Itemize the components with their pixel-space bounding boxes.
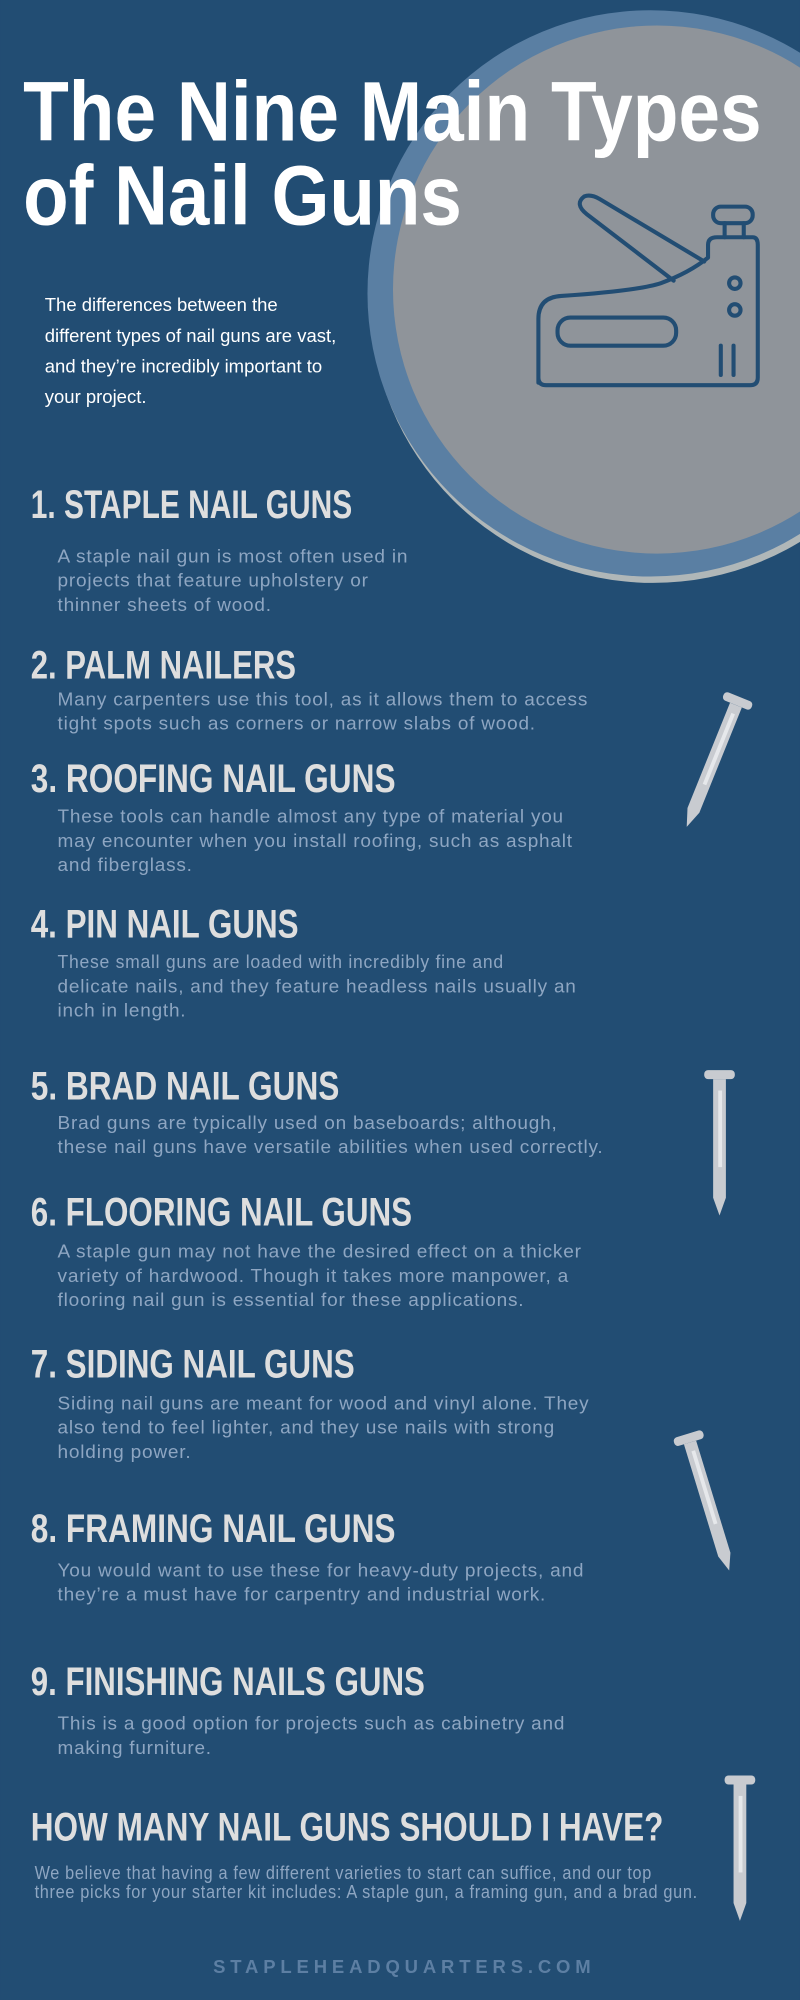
intro text: your project. (45, 386, 146, 407)
section 4: These small guns are loaded with incredibly fine and (58, 951, 504, 972)
intro text: and they’re incredibly important to (45, 355, 322, 376)
section 9 (31, 1660, 565, 1758)
section 1: thinner sheets of wood. (58, 594, 272, 615)
section 9: making furniture. (58, 1737, 212, 1758)
section: how many: HOW MANY NAIL GUNS SHOULD I HAVE? (31, 1806, 663, 1850)
section 7 (31, 1343, 589, 1462)
section 1 (31, 483, 408, 615)
section 2: tight spots such as corners or narrow slabs of wood. (58, 713, 536, 734)
section 1: A staple nail gun is most often used in (58, 545, 408, 566)
section 7: holding power. (58, 1441, 191, 1462)
section 8: You would want to use these for heavy-duty projects, and (58, 1560, 584, 1581)
icon: nail vertical 2 (725, 1776, 755, 1921)
title (23, 64, 762, 242)
icon: nail diagonal 1 (673, 691, 753, 833)
section 7: also tend to feel lighter, and they use nails with strong (58, 1417, 555, 1438)
section 6 (31, 1191, 582, 1310)
section 5: Brad guns are typically used on baseboards; although, (58, 1112, 558, 1133)
footer: STAPLEHEADQUARTERS.COM (213, 1956, 591, 1977)
section 6: 6. FLOORING NAIL GUNS (31, 1191, 412, 1235)
section 3: 3. ROOFING NAIL GUNS (31, 757, 396, 801)
section 8 (31, 1507, 584, 1605)
section 3: may encounter when you install roofing, such as asphalt (58, 830, 573, 851)
intro text (45, 294, 336, 407)
icon: nail diagonal 2 (673, 1429, 744, 1575)
section 8: they’re a must have for carpentry and industrial work. (58, 1584, 546, 1605)
section 5: 5. BRAD NAIL GUNS (31, 1064, 339, 1108)
section 8: 8. FRAMING NAIL GUNS (31, 1507, 396, 1551)
intro text: different types of nail guns are vast, (45, 325, 336, 346)
section 5: these nail guns have versatile abilities when used correctly. (58, 1136, 603, 1157)
section 6: variety of hardwood. Though it takes more manpower, a (58, 1265, 569, 1286)
section 7: 7. SIDING NAIL GUNS (31, 1343, 355, 1387)
section 9: This is a good option for projects such as cabinetry and (58, 1713, 565, 1734)
section 7: Siding nail guns are meant for wood and vinyl alone. They (58, 1392, 589, 1413)
section 5 (31, 1064, 603, 1157)
section 4: inch in length. (58, 1000, 186, 1021)
icon: staple gun (538, 196, 758, 385)
section 2: Many carpenters use this tool, as it allows them to access (58, 688, 588, 709)
section 1: projects that feature upholstery or (58, 570, 369, 591)
intro text: The differences between the (45, 294, 278, 315)
section 6: flooring nail gun is essential for these applications. (58, 1289, 524, 1310)
title: of Nail Guns (23, 148, 462, 242)
section 4: delicate nails, and they feature headless nails usually an (58, 975, 577, 996)
section 4: 4. PIN NAIL GUNS (31, 902, 299, 946)
section: how many (31, 1806, 698, 1902)
section 3: and fiberglass. (58, 854, 193, 875)
section: how many: three picks for your starter kit includes: A staple gun, a framing gun, and a brad gun. (35, 1881, 698, 1902)
icon: nail vertical 1 (704, 1070, 735, 1216)
section: how many: We believe that having a few different varieties to start can suffice, and our top (35, 1862, 652, 1883)
section 1: 1. STAPLE NAIL GUNS (31, 483, 352, 527)
section 3: These tools can handle almost any type of material you (58, 806, 564, 827)
section 2 (31, 644, 588, 734)
section 9: 9. FINISHING NAILS GUNS (31, 1660, 425, 1704)
section 2: 2. PALM NAILERS (31, 644, 296, 688)
decorative circle (367, 10, 800, 583)
section 6: A staple gun may not have the desired effect on a thicker (58, 1241, 582, 1262)
section 4 (31, 902, 577, 1021)
section 3 (31, 757, 573, 875)
